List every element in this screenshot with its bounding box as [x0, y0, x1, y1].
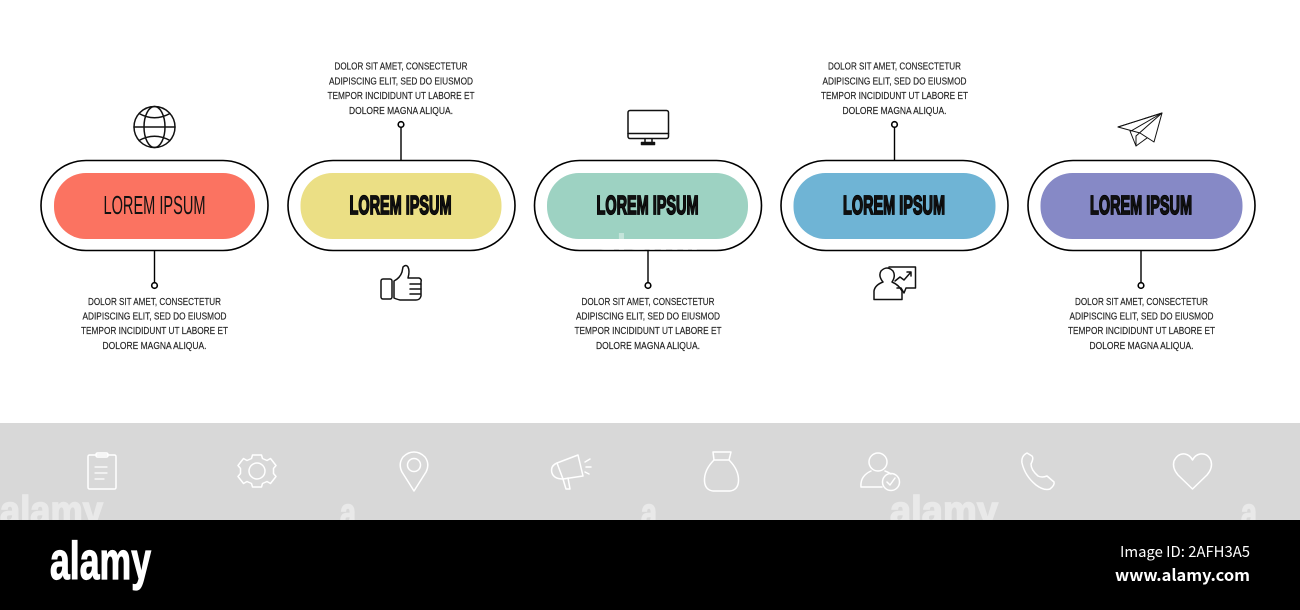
text 2: ADIPISCING ELIT, SED DO EIUSMOD [329, 76, 473, 88]
image id: Image ID: 2AFH3A5 [1120, 541, 1250, 562]
step 5 panel [1028, 113, 1255, 352]
text 1: DOLOR SIT AMET, CONSECTETUR [88, 297, 221, 308]
alamy logo: alamy [50, 532, 151, 591]
text 2: DOLORE MAGNA ALIQUA. [349, 106, 453, 117]
text 5: DOLOR SIT AMET, CONSECTETUR [1075, 297, 1208, 308]
step 1 panel [41, 106, 268, 352]
pill 4 [781, 160, 1008, 250]
icon: phone [1022, 453, 1054, 490]
icon: gear [238, 455, 276, 487]
text 3: TEMPOR INCIDIDUNT UT LABORE ET [574, 326, 722, 337]
connector 5 [1138, 250, 1144, 288]
icon: megaphone [552, 455, 591, 489]
text 1: ADIPISCING ELIT, SED DO EIUSMOD [82, 312, 226, 322]
icon: clipboard [88, 453, 116, 489]
icon: user check [861, 453, 900, 490]
pill 3: alamy [596, 227, 701, 271]
icon: thumbs up [381, 266, 421, 300]
watermark text: a [340, 491, 357, 535]
connector 1 [152, 250, 157, 288]
pill 5: LOREM IPSUM [1090, 190, 1192, 220]
step 3 panel [534, 110, 762, 352]
text 4: DOLOR SIT AMET, CONSECTETUR [828, 62, 961, 72]
text 4: DOLORE MAGNA ALIQUA. [842, 106, 946, 117]
watermark text [0, 494, 1256, 520]
text 4: TEMPOR INCIDIDUNT UT LABORE ET [821, 91, 968, 102]
text 3: ADIPISCING ELIT, SED DO EIUSMOD [576, 312, 720, 322]
watermark text: alamy [0, 489, 104, 533]
pill 5 [1028, 160, 1255, 250]
pill 2 [288, 160, 515, 250]
icon: monitor [628, 110, 668, 144]
pill 2: LOREM IPSUM [350, 190, 452, 220]
pill 3 [534, 160, 762, 252]
text 1: DOLORE MAGNA ALIQUA. [102, 341, 206, 352]
text 5: TEMPOR INCIDIDUNT UT LABORE ET [1068, 326, 1215, 337]
watermark text: a [641, 491, 658, 535]
icon: paper plane [1118, 113, 1162, 146]
step 4 panel [781, 62, 1008, 300]
watermark text: alamy [890, 489, 999, 533]
pill 1 [41, 160, 268, 250]
connector 4 [892, 122, 897, 160]
text 4: ADIPISCING ELIT, SED DO EIUSMOD [822, 76, 966, 88]
watermark text: a [1241, 491, 1258, 535]
text 2: TEMPOR INCIDIDUNT UT LABORE ET [328, 91, 474, 102]
icon: globe [134, 106, 175, 148]
pill 4: LOREM IPSUM [843, 190, 945, 220]
text 5 [1068, 297, 1215, 352]
text 3: DOLOR SIT AMET, CONSECTETUR [582, 297, 714, 308]
text 4 [821, 62, 968, 117]
text 1 [81, 297, 228, 352]
pill 3: LOREM IPSUM [596, 190, 698, 220]
pill 1: LOREM IPSUM [104, 190, 206, 220]
text 1: TEMPOR INCIDIDUNT UT LABORE ET [81, 326, 228, 337]
icon: location pin [400, 452, 428, 491]
text 3: DOLORE MAGNA ALIQUA. [596, 341, 700, 352]
black footer bar [0, 520, 1300, 610]
icon: money bag [704, 452, 739, 491]
connector 3 [645, 250, 651, 288]
text 2 [328, 62, 474, 117]
text 3 [574, 297, 722, 352]
text 5: ADIPISCING ELIT, SED DO EIUSMOD [1070, 312, 1214, 322]
icon: presenter with chart [874, 267, 916, 300]
icon: heart [1174, 454, 1212, 489]
text 5: DOLORE MAGNA ALIQUA. [1090, 341, 1194, 352]
connector 2 [398, 122, 404, 160]
grey icon band [0, 423, 1300, 520]
step 2 panel [288, 62, 515, 300]
website: www.alamy.com [1115, 562, 1250, 586]
text 2: DOLOR SIT AMET, CONSECTETUR [334, 62, 468, 72]
